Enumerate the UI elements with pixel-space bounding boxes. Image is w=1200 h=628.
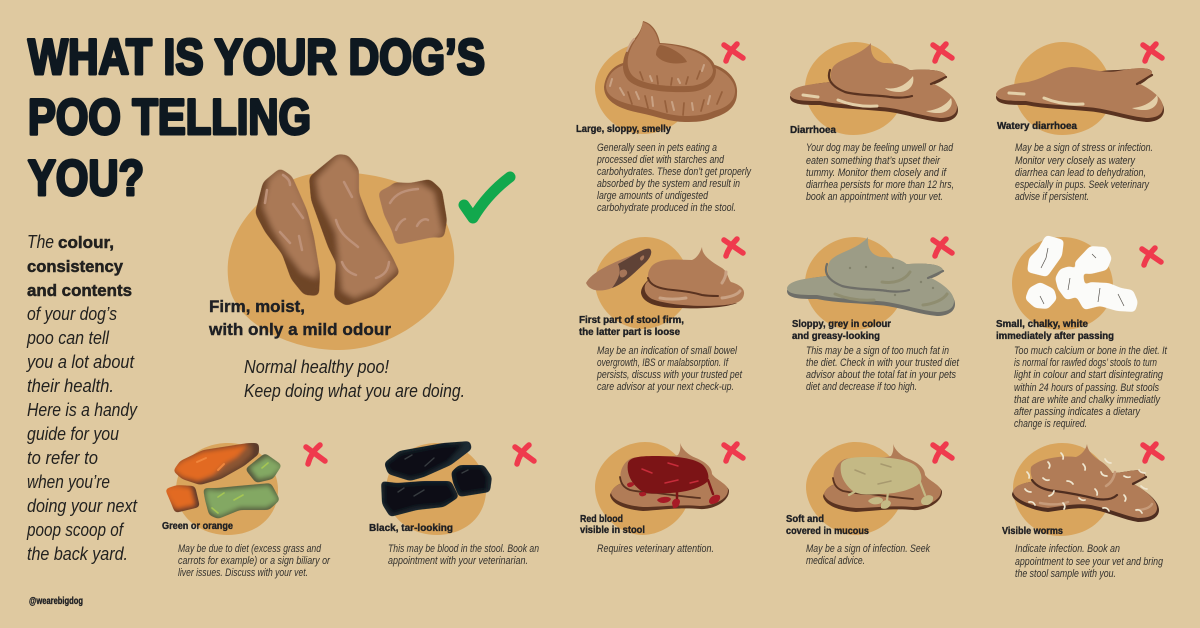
intro text block: poop scoop of: [26, 520, 125, 540]
label: small, chalky: [996, 319, 1114, 342]
description: small, chalky: Too much calcium or bone in the diet. It: [1014, 345, 1168, 357]
label: soft, mucous: Soft and: [786, 514, 824, 525]
icon: red cross: [724, 44, 743, 61]
description: diarrhoea: tummy. Monitor them closely and if: [806, 167, 947, 179]
description: diarrhoea: [806, 142, 954, 203]
intro text block: the back yard.: [27, 544, 128, 564]
description: small, chalky: after passing indicates a dietary: [1014, 406, 1141, 418]
description: black, tar-looking: [388, 543, 539, 567]
intro text block: poo can tell: [26, 328, 110, 348]
panel: red blood: [580, 442, 743, 555]
label: green or orange: Green or orange: [162, 521, 233, 532]
description: visible worms: the stool sample with you.: [1015, 568, 1116, 580]
description: watery diarrhoea: especially in pups. Seek veterinary: [1015, 179, 1150, 191]
handle: @wearebigdog: [29, 596, 83, 607]
description: first part firm: persists, discuss with your trusted pet: [596, 369, 743, 381]
label: small, chalky: Small, chalky, white: [996, 319, 1088, 330]
description: watery diarrhoea: advise if persistent.: [1015, 191, 1089, 203]
description: watery diarrhoea: Monitor very closely as watery: [1015, 155, 1136, 167]
label: first part firm: First part of stool firm,: [579, 315, 684, 326]
panel: large, sloppy, smelly: [576, 21, 752, 214]
description: sloppy, grey: the diet. Check in with your trusted diet: [806, 357, 960, 369]
intro text block: [25, 232, 138, 564]
description: diarrhoea: eaten something that’s upset their: [806, 155, 941, 167]
label: red blood: Red blood: [580, 514, 623, 525]
intro text block: of your dog’s: [27, 304, 117, 324]
description: diarrhoea: diarrhea persists for more than 12 hrs,: [806, 179, 954, 191]
illustration: green and orange stools: [165, 443, 282, 535]
panel: diarrhoea: [790, 42, 958, 203]
illustration: grey puddle: [787, 237, 955, 330]
intro text block: consistency: [27, 257, 124, 276]
description: sloppy, grey: This may be a sign of too much fat in: [806, 345, 949, 357]
description: large, sloppy, smelly: absorbed by the system and result in: [597, 178, 740, 190]
description: red blood: Requires veterinary attention.: [597, 543, 714, 555]
icon: red cross: [933, 44, 952, 61]
icon: red cross: [1143, 44, 1162, 61]
description: small, chalky: is normal for rawfed dogs’ stools to turn: [1014, 357, 1157, 369]
description: visible worms: appointment to see your vet and bring: [1015, 556, 1164, 568]
description: first part firm: overgrowth, IBS or malabsorption. If: [597, 357, 729, 369]
description: first part firm: May be an indication of small bowel: [597, 345, 737, 357]
description: watery diarrhoea: [1015, 142, 1153, 203]
description: watery diarrhoea: May be a sign of stress or infection.: [1015, 142, 1153, 154]
icon: red cross: [933, 444, 952, 461]
intro text block: when you’re: [27, 472, 110, 492]
description: watery diarrhoea: diarrhea can lead to dehydration,: [1015, 167, 1146, 179]
illustration: diarrhoea puddle: [790, 42, 958, 135]
illustration: black stools: [381, 441, 492, 535]
panel: healthy poo: [208, 154, 510, 401]
illustration: white chunks: [1012, 235, 1138, 330]
description: green or orange: May be due to diet (excess grass and: [178, 543, 322, 555]
description: small, chalky: [1014, 345, 1168, 430]
panel: first part firm, latter loose: [579, 237, 744, 393]
description: small, chalky: within 24 hours of passing. But stools: [1014, 382, 1159, 394]
label: black, tar-looking: Black, tar-looking: [369, 523, 453, 534]
label: red blood: visible in stool: [580, 525, 645, 536]
description: normal healthy poo: [244, 357, 465, 401]
description: first part firm: care advisor at your next check-up.: [597, 381, 734, 393]
icon: red cross: [1143, 444, 1162, 461]
intro text block: their health.: [27, 376, 114, 396]
description: large, sloppy, smelly: processed diet with starches and: [596, 154, 725, 166]
panel: black, tar-looking: [369, 441, 539, 567]
label: red blood: [580, 514, 645, 536]
icon: red cross: [515, 445, 534, 464]
intro text block: The: [27, 232, 54, 252]
label: soft, mucous: [786, 514, 869, 537]
description: sloppy, grey: diet and decrease if too high.: [806, 381, 917, 393]
description: normal healthy poo: Normal healthy poo!: [244, 357, 389, 377]
label: first part firm: [579, 315, 684, 338]
description: small, chalky: light in colour and start disintegrating: [1014, 369, 1164, 381]
description: green or orange: [178, 543, 331, 579]
illustration: firm then loose stool: [586, 237, 744, 329]
label: soft, mucous: covered in mucous: [786, 526, 869, 537]
label: sloppy, grey: [792, 319, 891, 342]
label: first part firm: the latter part is loose: [579, 327, 680, 338]
intro text block: guide for you: [27, 424, 119, 444]
icon: red cross: [1142, 248, 1161, 265]
illustration: blood on stool: [595, 442, 729, 535]
intro text block: to refer to: [27, 448, 98, 468]
label: visible worms: Visible worms: [1002, 526, 1063, 537]
intro text block: doing your next: [27, 496, 138, 516]
description: small, chalky: change is required.: [1014, 418, 1087, 430]
illustration: watery puddle: [996, 42, 1164, 135]
description: black, tar-looking: appointment with your veterinarian.: [388, 555, 528, 567]
title: POO TELLING: [28, 89, 311, 145]
icon: red cross: [306, 445, 325, 464]
panel: watery diarrhoea: [996, 42, 1164, 203]
title: WHAT IS YOUR DOG’S: [28, 29, 485, 85]
panel: soft, mucous: [786, 442, 952, 567]
description: green or orange: liver issues. Discuss with your vet.: [178, 567, 308, 579]
description: sloppy, grey: advisor about the total fat in your pets: [806, 369, 956, 381]
illustration: mucous-covered stool: [806, 442, 942, 535]
intro text block: you a lot about: [25, 352, 135, 372]
intro text block: Here is a handy: [27, 400, 138, 420]
description: soft, mucous: medical advice.: [806, 555, 865, 567]
description: first part firm: [596, 345, 743, 393]
description: diarrhoea: book an appointment with your vet.: [806, 191, 943, 203]
description: soft, mucous: May be a sign of infection. Seek: [806, 543, 930, 555]
label: sloppy, grey: Sloppy, grey in colour: [792, 319, 891, 330]
label: small, chalky: immediately after passing: [996, 331, 1114, 342]
title: YOU?: [28, 150, 144, 206]
description: small, chalky: that are white and chalky immediatly: [1014, 394, 1161, 406]
panel: sloppy, grey: [787, 237, 960, 393]
description: black, tar-looking: This may be blood in the stool. Book an: [388, 543, 539, 555]
label: sloppy, grey: and greasy-looking: [792, 331, 880, 342]
illustration: stool with worms: [1012, 443, 1159, 536]
label: large, sloppy, smelly: Large, sloppy, smelly: [576, 124, 671, 135]
icon: red cross: [933, 239, 952, 256]
description: visible worms: [1015, 543, 1164, 580]
icon: red cross: [724, 444, 743, 461]
panel: visible worms: [1002, 443, 1164, 580]
label: diarrhoea: Diarrhoea: [790, 125, 836, 136]
icon: red cross: [724, 239, 743, 256]
description: normal healthy poo: Keep doing what you are doing.: [244, 381, 465, 401]
illustration: healthy poo: [228, 154, 454, 350]
heading: firm, moist: [208, 297, 391, 339]
panel: small, chalky, white: [996, 235, 1168, 430]
intro text block: and contents: [27, 281, 132, 300]
description: large, sloppy, smelly: [596, 142, 752, 214]
description: large, sloppy, smelly: carbohydrates. These don’t get properly: [597, 166, 752, 178]
description: large, sloppy, smelly: large amounts of undigested: [597, 190, 709, 202]
icon: green check mark: [464, 177, 510, 218]
description: soft, mucous: [806, 543, 930, 567]
description: sloppy, grey: [806, 345, 960, 393]
heading: firm, moist: with only a mild odour: [208, 320, 391, 339]
title: [28, 29, 485, 206]
description: large, sloppy, smelly: Generally seen in pets eating a: [597, 142, 717, 154]
label: watery diarrhoea: Watery diarrhoea: [997, 121, 1077, 132]
description: large, sloppy, smelly: carbohydrate produced in the stool.: [597, 202, 736, 214]
description: visible worms: Indicate infection. Book an: [1015, 543, 1120, 555]
intro text block: colour,: [58, 233, 114, 252]
heading: firm, moist: Firm, moist,: [209, 297, 305, 316]
description: diarrhoea: Your dog may be feeling unwell or had: [806, 142, 954, 154]
panel: green or orange: [162, 443, 331, 579]
description: green or orange: carrots for example) or a sign biliary or: [178, 555, 331, 567]
illustration: large pile: [595, 21, 737, 134]
